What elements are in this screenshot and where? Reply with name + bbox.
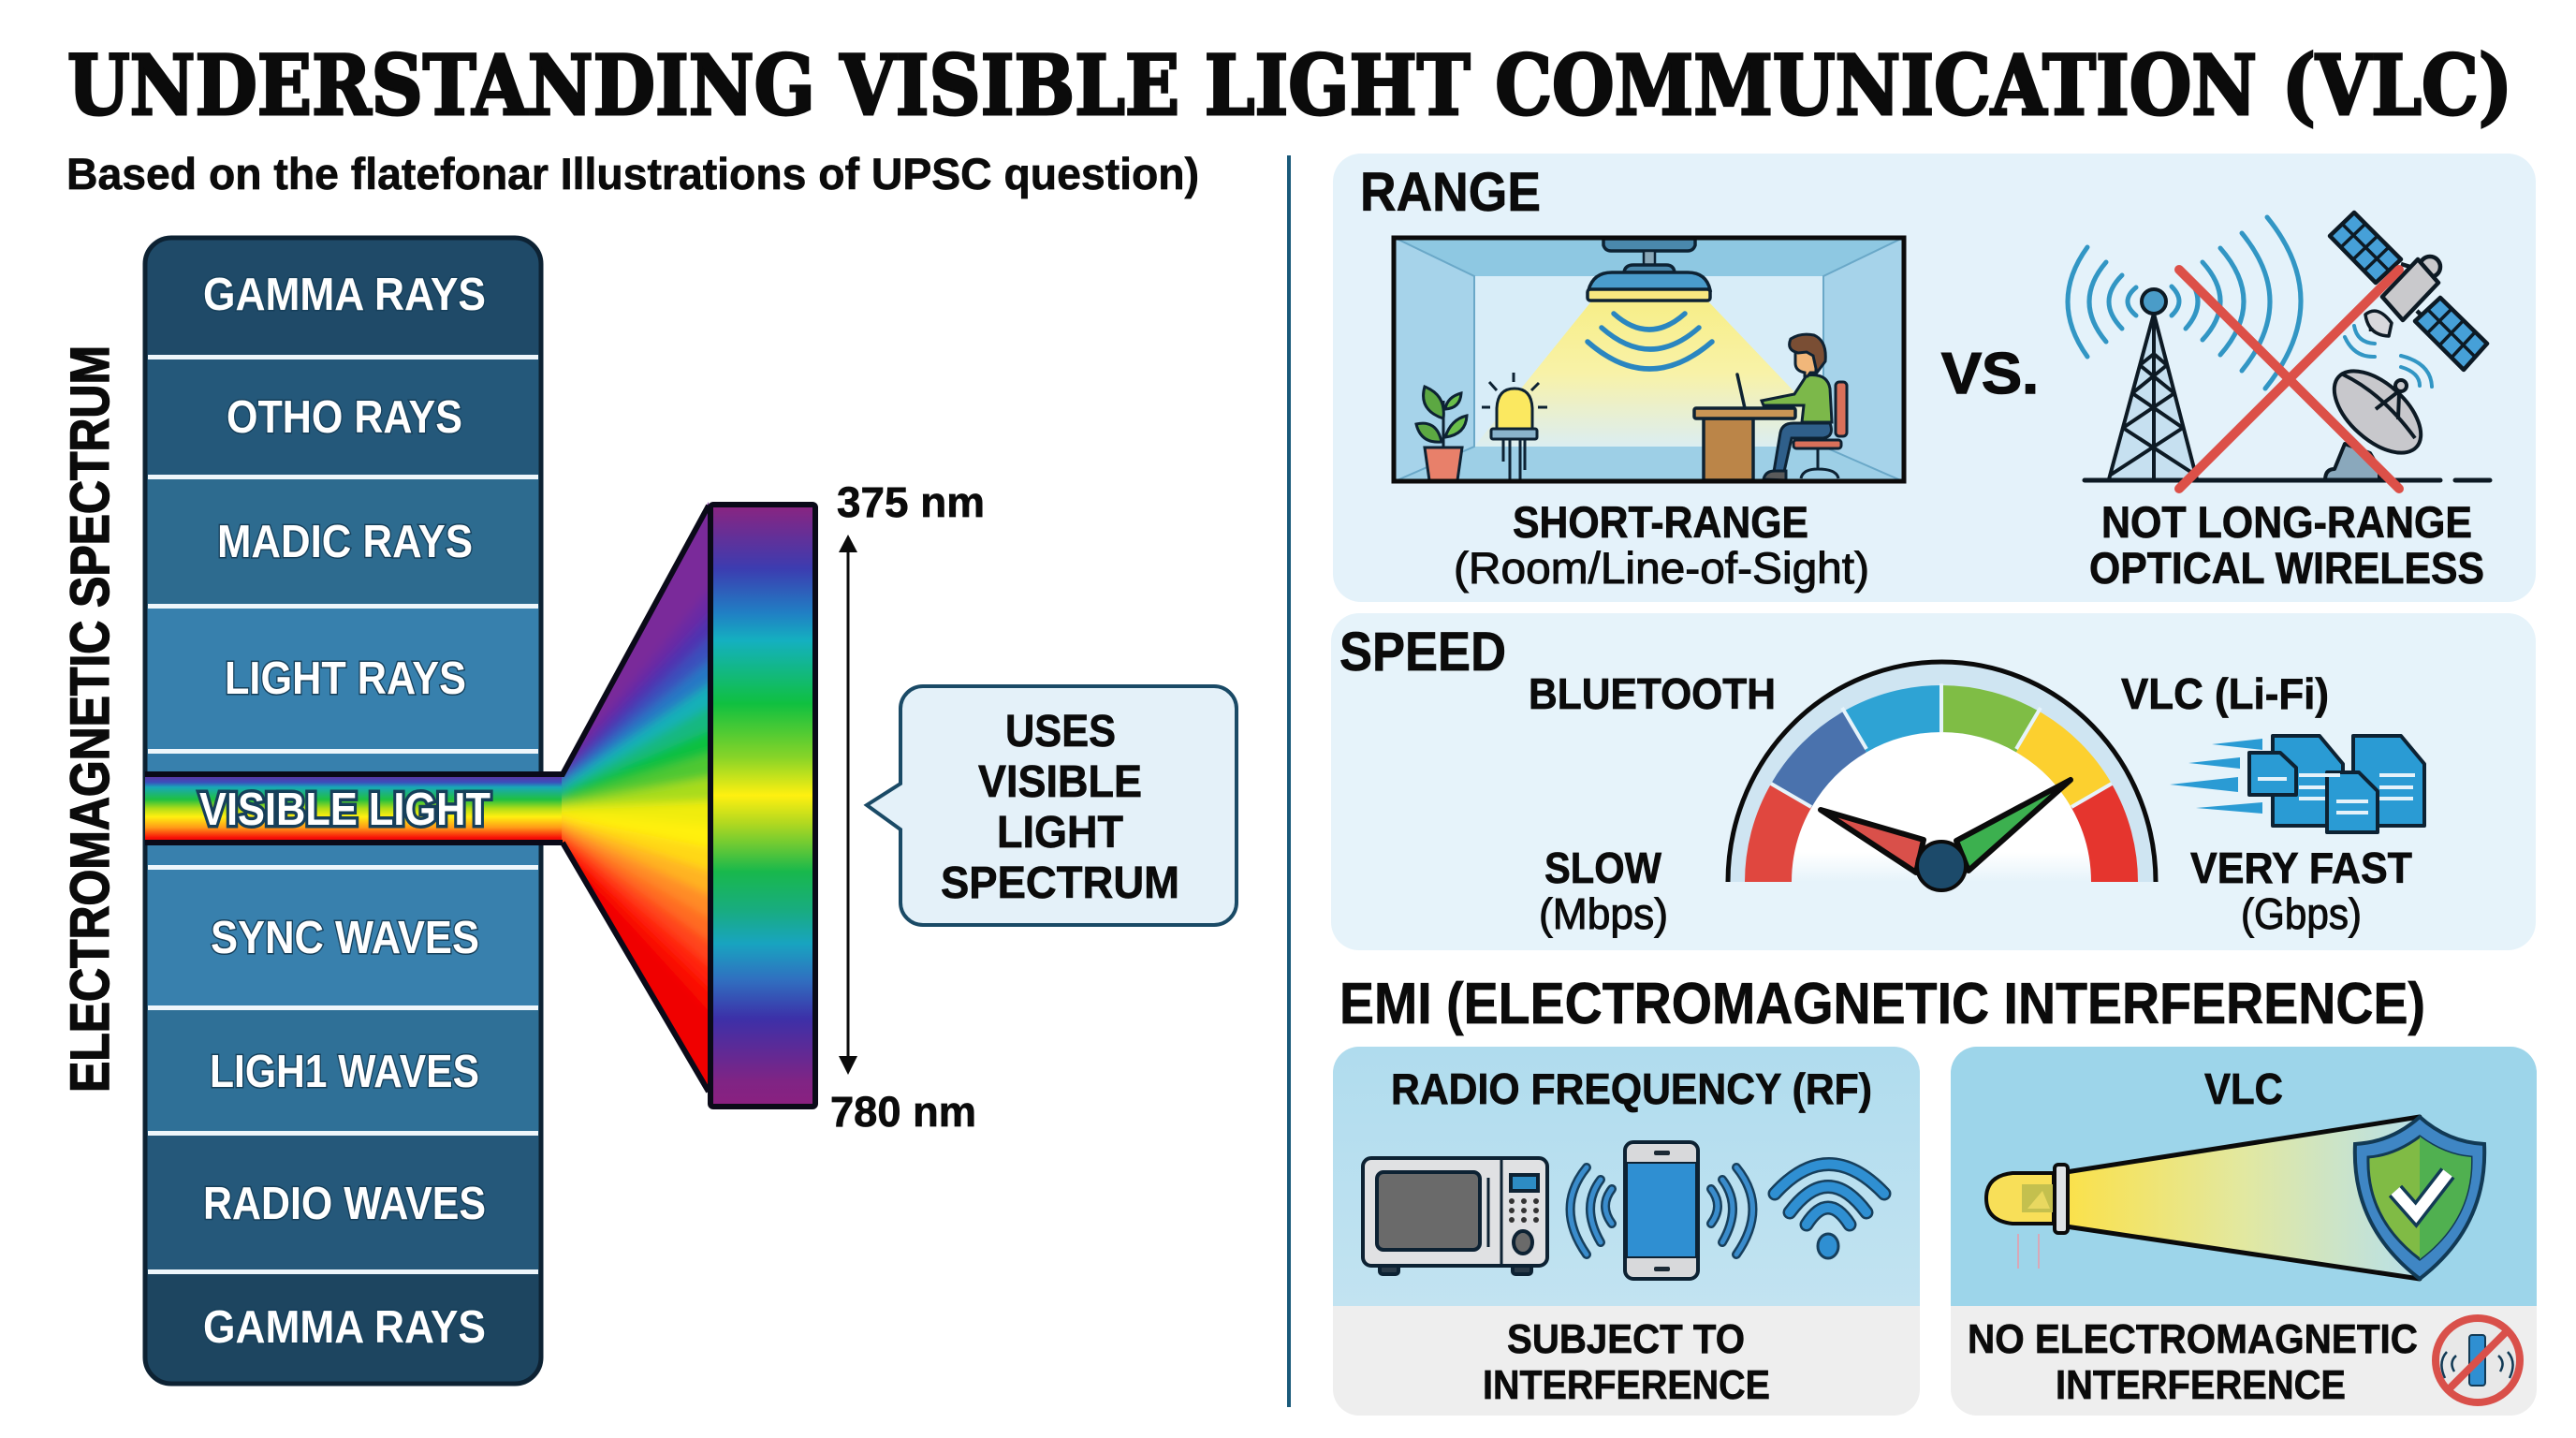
label: ligh1 waves: LIGH1 WAVES: [210, 1047, 479, 1097]
fast data icons: [2170, 736, 2424, 832]
label: gamma rays bottom: GAMMA RAYS: [203, 1302, 486, 1353]
heading: rf: RADIO FREQUENCY (RF): [1391, 1064, 1872, 1113]
caption: not long range: OPTICAL WIRELESS: [2089, 543, 2484, 593]
visible light band and spectrum prism: [145, 502, 818, 1109]
panel: vlc: [1951, 1047, 2537, 1416]
right needle: [1956, 780, 2071, 871]
ceiling lamp: [1588, 239, 1710, 301]
label: gamma rays: GAMMA RAYS: [203, 270, 486, 320]
label: very fast gbps: VERY FAST: [2190, 844, 2412, 892]
light waves: [1588, 314, 1712, 369]
icon: shield: [2355, 1117, 2484, 1279]
caption: subject to interference: SUBJECT TO: [1507, 1316, 1745, 1362]
label: radio waves: RADIO WAVES: [203, 1179, 486, 1229]
caption: short range: [1454, 497, 1869, 593]
light cone: [1474, 301, 1823, 447]
label: madic rays: MADIC RAYS: [217, 517, 473, 567]
label: very fast gbps: [2190, 844, 2412, 938]
ground line: [2085, 477, 2490, 483]
heading: emi: EMI (ELECTROMAGNETIC INTERFERENCE): [1339, 972, 2425, 1036]
caption: not long range: NOT LONG-RANGE: [2101, 497, 2472, 547]
caption: no electromagnetic interference: [1968, 1316, 2418, 1408]
label: light rays: LIGHT RAYS: [225, 653, 466, 704]
radio waves: [2068, 217, 2301, 389]
room frame: [1394, 238, 1904, 481]
heading: speed: SPEED: [1339, 622, 1506, 682]
label: otho rays: OTHO RAYS: [227, 392, 462, 443]
speedometer gauge: [1728, 662, 2156, 890]
red cross: [2179, 270, 2399, 489]
panel: electromagnetic spectrum stack: [145, 238, 541, 1384]
label: 375 nm: 375 nm: [837, 478, 985, 526]
label: very fast gbps: (Gbps): [2241, 889, 2362, 938]
room illustration: [1393, 237, 1905, 482]
callout: uses visible light spectrum: [867, 686, 1237, 925]
label: slow mbps: [1539, 844, 1668, 938]
label: slow mbps: (Mbps): [1539, 889, 1668, 938]
icon: wifi: [1775, 1165, 1884, 1258]
icon: phone with signal: [1571, 1142, 1752, 1279]
label: 780 nm: 780 nm: [830, 1088, 976, 1136]
caption: not long range: [2089, 497, 2484, 593]
label: visible light: VISIBLE LIGHT: [199, 785, 490, 835]
heading: range: RANGE: [1360, 162, 1541, 223]
panel: range: [1333, 154, 2536, 602]
callout: uses visible light spectrum: SPECTRUM: [941, 858, 1179, 908]
prism bar: [710, 506, 815, 1106]
icon: microwave: [1363, 1158, 1547, 1274]
vs label: VS.: [1941, 342, 2039, 406]
led bulb: [1482, 373, 1547, 479]
caption: no electromagnetic interference: INTERFERENCE: [2056, 1362, 2346, 1408]
subtitle: Based on the flatefonar Illustrations of UPSC question): [66, 149, 1199, 198]
label: bluetooth: BLUETOOTH: [1529, 669, 1776, 718]
icon: no phone signal: [2436, 1318, 2520, 1402]
person at desk: [1762, 334, 1847, 480]
icon: led with beam: [1986, 1117, 2420, 1279]
plant: [1416, 387, 1467, 480]
heading: vlc: VLC: [2204, 1064, 2283, 1113]
label: vlc li-fi: VLC (Li-Fi): [2121, 669, 2329, 718]
callout: uses visible light spectrum: VISIBLE: [978, 757, 1142, 807]
radio tower: [2109, 289, 2198, 479]
callout: uses visible light spectrum: USES: [1005, 707, 1116, 756]
caption: short range: SHORT-RANGE: [1513, 497, 1808, 547]
vertical axis label: ELECTROMAGNETIC SPECTRUM: [60, 345, 121, 1093]
satellite: [2330, 213, 2487, 370]
center divider: [1287, 155, 1291, 1407]
panel: speed: [1331, 613, 2536, 950]
caption: subject to interference: INTERFERENCE: [1483, 1362, 1770, 1408]
long range illustration: [2068, 213, 2490, 489]
left needle: [1821, 810, 1924, 873]
label: slow mbps: SLOW: [1544, 844, 1662, 892]
caption: subject to interference: [1483, 1316, 1770, 1408]
desk: [1694, 374, 1795, 480]
callout: uses visible light spectrum: LIGHT: [997, 808, 1123, 858]
panel: radio frequency: [1333, 1047, 1920, 1416]
label: sync waves: SYNC WAVES: [211, 913, 479, 963]
wavelength arrow and labels: [830, 478, 985, 1136]
caption: short range: (Room/Line-of-Sight): [1454, 543, 1869, 593]
fan of rainbow colours: [562, 502, 709, 1084]
satellite dish: [2320, 356, 2436, 480]
caption: no electromagnetic interference: NO ELECTROMAGNETIC: [1968, 1316, 2418, 1362]
